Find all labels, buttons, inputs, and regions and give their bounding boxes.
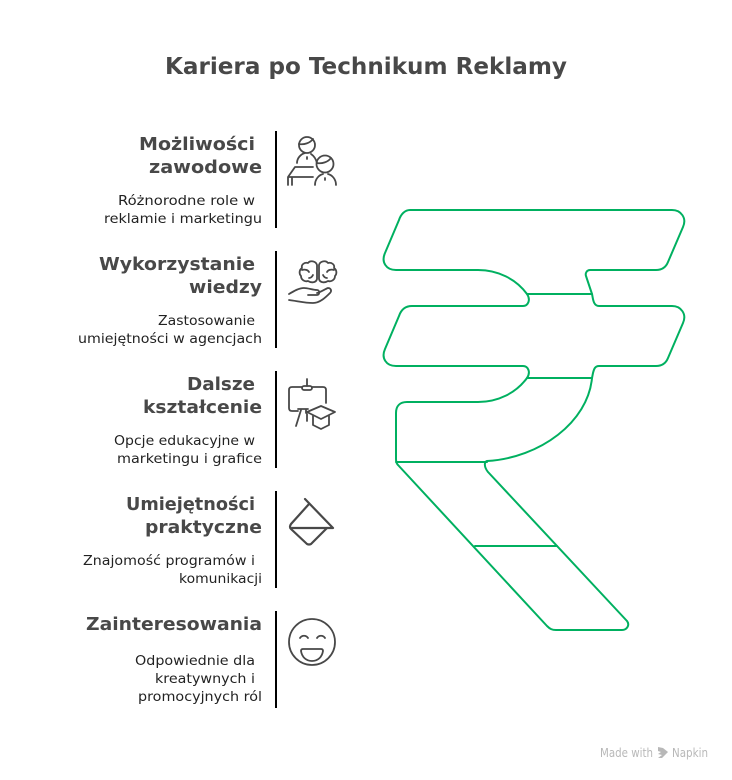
text block: reklamie i marketingu xyxy=(104,211,262,227)
text block xyxy=(135,653,262,705)
text block xyxy=(78,313,262,347)
text block xyxy=(104,193,262,227)
heading: Umiejętności xyxy=(126,494,255,515)
text block: Różnorodne role w xyxy=(118,193,255,209)
text block: marketingu i grafice xyxy=(117,451,262,467)
heading xyxy=(143,374,262,418)
heading: Dalsze xyxy=(187,374,255,395)
heading: wiedzy xyxy=(189,277,262,298)
panel: Wykorzystanie wiedzy xyxy=(78,251,336,348)
title: Kariera po Technikum Reklamy xyxy=(165,54,567,80)
heading: Możliwości xyxy=(139,134,255,155)
panel: Zainteresowania xyxy=(86,611,335,708)
heading: Zainteresowania xyxy=(86,614,262,635)
text block: kreatywnych i xyxy=(155,671,255,687)
chart: rupee symbol outline xyxy=(384,210,684,630)
icon: Napkin logo xyxy=(658,747,668,758)
icon: layered diamond xyxy=(290,499,333,544)
icon: brain over hand xyxy=(289,261,336,303)
text block: Odpowiednie dla xyxy=(135,653,255,669)
heading: praktyczne xyxy=(145,517,262,538)
panel: Dalsze kształcenie xyxy=(114,371,335,468)
heading xyxy=(99,254,262,298)
watermark: Made with Napkin xyxy=(600,746,708,760)
icon: people at desk xyxy=(288,137,336,185)
text block xyxy=(114,433,262,467)
heading: zawodowe xyxy=(149,157,262,178)
heading: Wykorzystanie xyxy=(99,254,255,275)
heading: kształcenie xyxy=(143,397,262,418)
text block: Opcje edukacyjne w xyxy=(114,433,255,449)
text block: promocyjnych ról xyxy=(138,689,262,705)
heading xyxy=(139,134,262,178)
text block xyxy=(83,553,262,587)
watermark: Made with Napkin: Made with xyxy=(600,746,653,760)
text block: Zastosowanie xyxy=(158,313,255,329)
icon: smiling face xyxy=(289,619,335,665)
text block: umiejętności w agencjach xyxy=(78,331,262,347)
heading xyxy=(126,494,262,538)
watermark: Made with Napkin: Napkin xyxy=(672,746,708,760)
icon: board and graduation cap xyxy=(289,379,335,429)
text block: komunikacji xyxy=(179,571,262,587)
panel: Umiejętności praktyczne xyxy=(83,491,333,588)
text block: Znajomość programów i xyxy=(83,553,255,569)
panel: Możliwości zawodowe xyxy=(104,131,336,228)
